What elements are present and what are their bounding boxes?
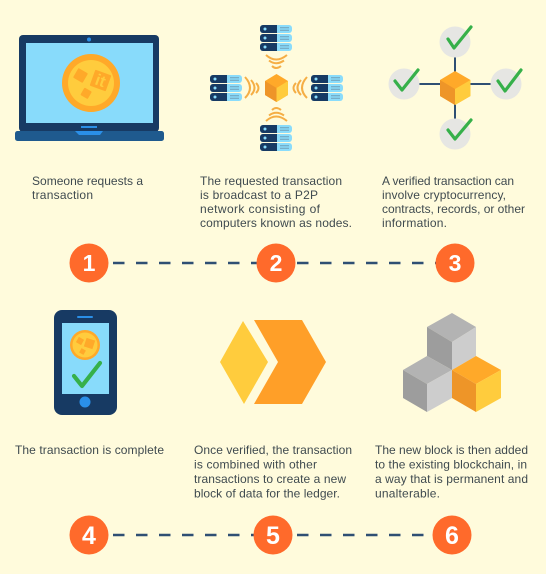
text: step 6 description: unalterable. bbox=[375, 486, 440, 500]
text: step 3 description: information. bbox=[382, 216, 447, 230]
connector: steps 4 to 6 dashed line bbox=[113, 534, 434, 536]
badge: step 2: 2 bbox=[270, 250, 282, 276]
text: step 5 description: block of data for the ledger. bbox=[194, 486, 340, 500]
badge: step 1: 1 bbox=[83, 250, 96, 276]
text: step 4 description: The transaction is complete bbox=[15, 443, 164, 457]
badge: step 1 bbox=[70, 244, 108, 282]
icon: verified nodes around a block bbox=[388, 26, 522, 150]
text: step 6 description: The new block is then added bbox=[375, 443, 528, 457]
icon: laptop with coin: it bbox=[93, 72, 108, 91]
text: step 3 description: A verified transaction can bbox=[382, 174, 514, 188]
text: step 2 description: is broadcast to a P2P bbox=[200, 188, 318, 202]
text: step 2 description: computers known as nodes. bbox=[200, 216, 352, 230]
badge: step 6 bbox=[432, 516, 472, 554]
text: step 1 description: transaction bbox=[32, 188, 93, 202]
text: step 2 description: The requested transaction bbox=[200, 174, 342, 188]
icon: P2P network of server nodes bbox=[210, 25, 343, 151]
icon: laptop with coin bbox=[15, 35, 164, 141]
text: step 6 description: to the existing blockchain, in bbox=[375, 458, 527, 472]
text: step 2 description: network consisting of bbox=[200, 202, 321, 216]
text: step 3 description: involve cryptocurrency, bbox=[382, 188, 506, 202]
badge: step 4: 4 bbox=[82, 522, 96, 550]
text: step 3 description: contracts, records, or other bbox=[382, 202, 525, 216]
connector: steps 1 to 3 dashed line bbox=[113, 262, 438, 264]
icon: combined data hexagon bbox=[220, 320, 326, 404]
text: step 1 description: Someone requests a bbox=[32, 174, 143, 188]
text: step 5 description: is combined with other bbox=[194, 458, 317, 472]
text: step 6 description: a way that is permanent and bbox=[375, 472, 528, 486]
icon: phone with coin and check bbox=[54, 310, 117, 415]
badge: step 4 bbox=[70, 516, 108, 554]
badge: step 2 bbox=[256, 244, 296, 282]
badge: step 5: 5 bbox=[266, 522, 280, 550]
text: step 5 description: transactions to create a new bbox=[194, 472, 346, 486]
badge: step 3: 3 bbox=[449, 250, 461, 276]
text: step 5 description: Once verified, the transaction bbox=[194, 443, 352, 457]
badge: step 3 bbox=[436, 244, 474, 282]
badge: step 5 bbox=[254, 516, 292, 554]
icon: blocks added to the chain bbox=[403, 313, 501, 412]
badge: step 6: 6 bbox=[445, 522, 459, 550]
